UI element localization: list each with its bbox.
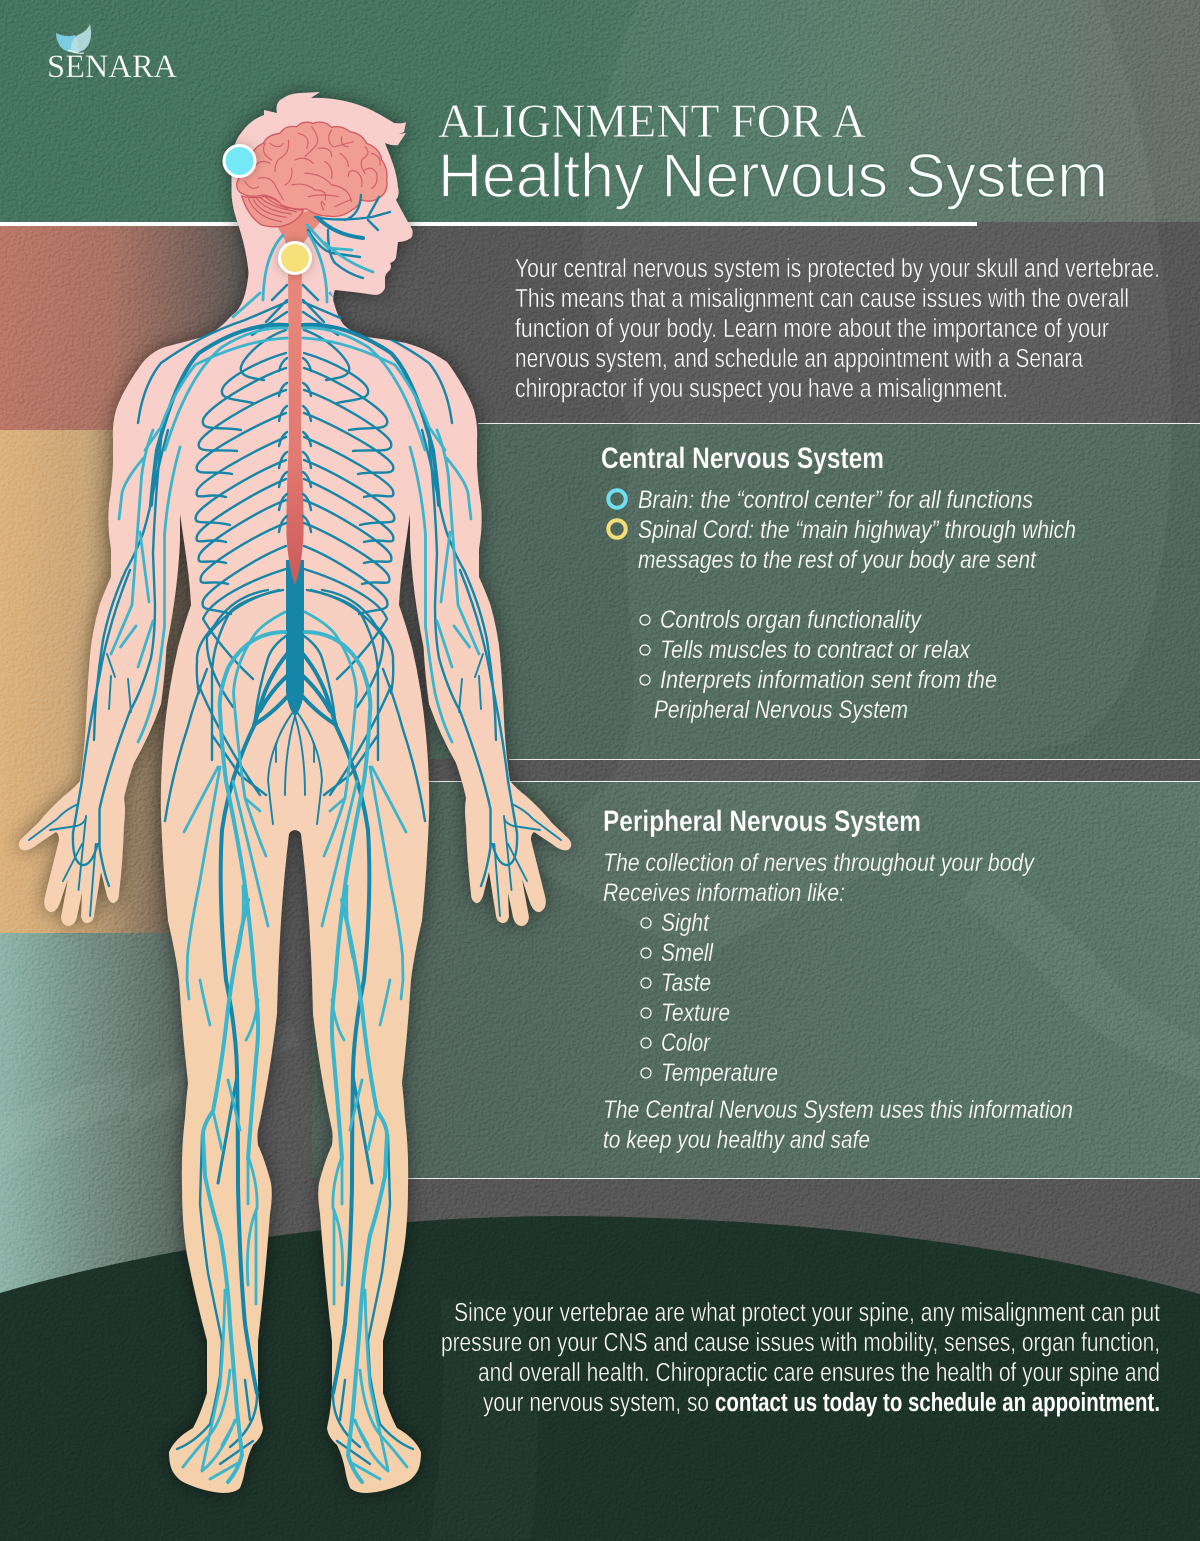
nervous system, left bbox=[29, 285, 295, 1482]
divider: peripheral bottom bbox=[408, 1178, 1200, 1179]
white rule under header bbox=[0, 222, 977, 226]
divider: intro bbox=[478, 423, 1200, 424]
panel: red strip bbox=[0, 226, 250, 430]
central list bbox=[638, 486, 1076, 724]
brain stem bbox=[272, 210, 323, 263]
icon: spinal cord bullet bbox=[608, 520, 626, 538]
peripheral list: Sight bbox=[661, 909, 710, 937]
human body silhouette bbox=[19, 92, 571, 1493]
facial nerves bbox=[263, 195, 390, 302]
panel: tan strip bbox=[0, 430, 200, 933]
peripheral description bbox=[603, 849, 1035, 907]
peripheral list bbox=[641, 909, 778, 1087]
peripheral description: Receives information like: bbox=[603, 879, 845, 907]
peripheral conclusion: to keep you healthy and safe bbox=[603, 1126, 870, 1154]
lumbar cord bbox=[286, 560, 304, 717]
peripheral conclusion: The Central Nervous System uses this information bbox=[603, 1096, 1073, 1124]
left half of body bbox=[19, 267, 296, 1493]
closing text: your nervous system, so bbox=[483, 1389, 709, 1417]
central list: messages to the rest of your body are sent bbox=[638, 546, 1037, 574]
icon: brain bullet bbox=[608, 490, 626, 508]
title: Healthy Nervous System bbox=[438, 142, 1108, 211]
divider: peripheral top bbox=[428, 781, 1200, 782]
intro text: chiropractor if you suspect you have a misalignment. bbox=[515, 375, 1008, 403]
nervous system, right bbox=[295, 285, 561, 1482]
central list: Tells muscles to contract or relax bbox=[660, 636, 971, 664]
right half of body bbox=[294, 267, 571, 1493]
panel: dark footer dome bbox=[0, 1216, 1200, 1541]
intro text: nervous system, and schedule an appointment with a Senara bbox=[515, 345, 1084, 373]
marker: brain bbox=[224, 146, 255, 176]
central list: Spinal Cord: the “main highway” through which bbox=[638, 516, 1076, 544]
peripheral list: Taste bbox=[661, 969, 711, 997]
central list: Brain: the “control center” for all functions bbox=[638, 486, 1033, 514]
peripheral list: Texture bbox=[661, 999, 730, 1027]
title bbox=[438, 95, 1108, 211]
head and neck bbox=[231, 92, 447, 400]
title: ALIGNMENT FOR A bbox=[438, 95, 866, 148]
divider: central bottom bbox=[509, 759, 1200, 760]
heading: central nervous system: Central Nervous System bbox=[601, 442, 884, 475]
central list: Controls organ functionality bbox=[660, 606, 922, 634]
intro text bbox=[515, 255, 1160, 403]
logo bbox=[47, 24, 177, 85]
peripheral description: The collection of nerves throughout your body bbox=[603, 849, 1035, 877]
panel: peripheral nervous system text bbox=[603, 805, 1073, 1154]
peripheral conclusion bbox=[603, 1096, 1073, 1154]
logo wordmark: SENARA bbox=[47, 49, 177, 85]
peripheral list: Color bbox=[661, 1029, 711, 1057]
peripheral list: Temperature bbox=[661, 1059, 778, 1087]
central list: Peripheral Nervous System bbox=[654, 696, 908, 724]
cerebrum bbox=[237, 122, 387, 217]
cerebellum bbox=[242, 196, 303, 227]
panel: central nervous system text bbox=[601, 442, 1076, 724]
panel: top green band bbox=[0, 0, 1200, 222]
panel: teal strip bbox=[0, 933, 185, 1303]
icon: logo leaves bbox=[56, 24, 91, 53]
heading: peripheral nervous system: Peripheral Nervous System bbox=[603, 805, 921, 838]
panel: peripheral nervous system background bbox=[312, 781, 1200, 1178]
panel: central nervous system background bbox=[430, 424, 1200, 759]
central list: Interprets information sent from the bbox=[660, 666, 997, 694]
marker: spinal cord bbox=[280, 242, 310, 274]
brain bbox=[237, 122, 387, 263]
red cord bbox=[286, 255, 304, 585]
spinal cord bbox=[286, 255, 304, 717]
closing text bbox=[441, 1299, 1160, 1417]
peripheral list: Smell bbox=[661, 939, 714, 967]
